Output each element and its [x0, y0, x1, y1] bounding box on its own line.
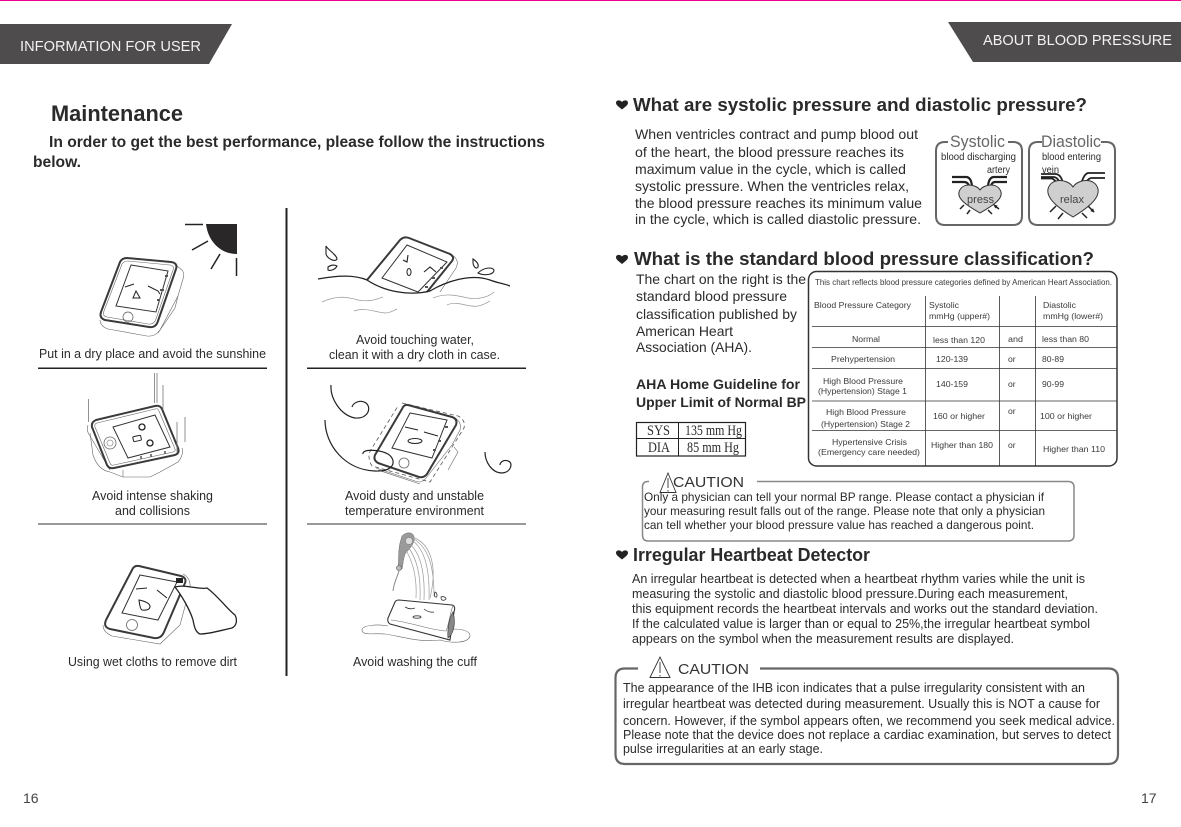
table: blood pressure categories [808, 272, 1117, 466]
page number: 16: 16 [23, 790, 39, 806]
icon: wind swirls [325, 385, 511, 473]
heart label: press: press [967, 194, 994, 206]
icon: cuff [388, 600, 455, 640]
banner: about blood pressure [948, 22, 1181, 62]
caption: Avoid dusty and unstable [345, 489, 484, 503]
banner: information for user [0, 24, 232, 64]
intro text [33, 134, 545, 171]
callout: second caution: CAUTION [678, 661, 749, 678]
caution text: Please note that the device does not replace a cardiac examination, but serves to detect [623, 727, 1111, 742]
banner: information for user: INFORMATION FOR USER [20, 39, 201, 55]
caution text: your measuring result falls out of the range. Please note that only a physician [644, 505, 1045, 518]
text: systolic and diastolic explanation: in the cycle, which is called diastolic pressure. [635, 211, 921, 227]
icon: water waves [318, 276, 510, 313]
caption: Put in a dry place and avoid the sunshine [39, 347, 266, 361]
caution text: pulse irregularities at an early stage. [623, 741, 823, 756]
caption: Avoid touching water, [356, 333, 474, 347]
icon: shaking monitor [87, 406, 182, 477]
heading: maintenance: Maintenance [51, 101, 183, 126]
page number: 17: 17 [1141, 790, 1157, 806]
table header: Blood Pressure Category [814, 300, 912, 310]
diagram: systolic heart [936, 132, 1022, 225]
text: AHA home guideline: Upper Limit of Normal BP [636, 394, 806, 410]
caution text: concern. However, if the symbol appears often, we recommend you seek medical advice. [623, 713, 1115, 728]
icon: compressed heart [959, 185, 1001, 213]
row: normal: less than 120 [933, 335, 985, 345]
icon: blood vessels [1041, 173, 1105, 185]
text: irregular heartbeat explanation: appears on the symbol when the measurement results are displayed. [632, 631, 1014, 646]
table title: This chart reflects blood pressure categories defined by American Heart Association. [815, 277, 1112, 287]
icon: warning triangle [660, 473, 676, 492]
icon: dusty monitor [369, 403, 464, 484]
table header: Systolic [929, 300, 960, 310]
table header: Diastolic [1043, 300, 1077, 310]
text: systolic and diastolic explanation [635, 126, 922, 227]
caution text: The appearance of the IHB icon indicates that a pulse irregularity consistent with an [623, 680, 1085, 695]
row: normal: Normal [852, 334, 880, 344]
caption [345, 489, 485, 518]
icon: blood vessels [952, 177, 1007, 186]
row: stage 2: High Blood Pressure [826, 407, 906, 417]
caution text [623, 680, 1115, 756]
section heading: irregular heartbeat: Irregular Heartbeat Detector [633, 545, 870, 565]
row: stage 2 [821, 406, 1092, 429]
caution text: Only a physician can tell your normal BP range. Please contact a physician if [644, 491, 1045, 504]
text: systolic and diastolic explanation: systolic pressure. When the ventricles relax, [635, 178, 909, 194]
panel: avoid dust and unstable temperature [325, 385, 511, 518]
caution text: irregular heartbeat was detected during measurement. Usually this is NOT a cause for [623, 696, 1101, 711]
icon: monitor being wiped [103, 566, 190, 644]
caption: and collisions [115, 504, 190, 518]
row: prehypertension: or [1008, 354, 1016, 364]
icon: sun [185, 224, 237, 276]
row: hypertensive crisis: Higher than 110 [1043, 444, 1105, 454]
table: home limits: DIA [648, 440, 670, 456]
text: AHA home guideline [636, 376, 806, 410]
icon: inward arrows [960, 205, 999, 214]
diagram: diastolic heart: Diastolic [1041, 132, 1101, 151]
row: stage 1: or [1008, 379, 1016, 389]
row: prehypertension: 80-89 [1042, 354, 1064, 364]
text: irregular heartbeat explanation: measuring the systolic and diastolic blood pressure.During each measurement, [632, 586, 1068, 601]
row: stage 2: 100 or higher [1040, 411, 1092, 421]
icon: monitor in sunshine [100, 258, 184, 336]
callout: first caution: CAUTION [673, 474, 744, 491]
row: stage 1: 90-99 [1042, 379, 1064, 389]
caption: temperature environment [345, 504, 485, 518]
intro text: below. [33, 154, 81, 171]
icon: heart bullet [616, 100, 628, 110]
heart label: relax: relax [1060, 194, 1085, 206]
panel: avoid washing the cuff [353, 533, 478, 669]
table: home limits: 135 mm Hg [685, 423, 742, 439]
icon: motion lines [88, 373, 185, 453]
caption [92, 489, 213, 518]
text: systolic and diastolic explanation: maximum value in the cycle, which is called [635, 161, 906, 177]
table: home limits: 85 mm Hg [687, 440, 739, 456]
callout: second caution [616, 657, 1118, 764]
row: normal: less than 80 [1042, 334, 1089, 344]
intro text: In order to get the best performance, please follow the instructions [49, 134, 545, 151]
text: chart introduction: American Heart [636, 323, 733, 339]
table: home limits: SYS [647, 423, 670, 439]
callout: first caution [642, 473, 1074, 541]
table header: mmHg (lower#) [1043, 311, 1103, 321]
icon: puddle [362, 625, 470, 642]
banner: about blood pressure: ABOUT BLOOD PRESSURE [983, 33, 1172, 49]
text: chart introduction: Association (AHA). [636, 339, 752, 355]
diagram: systolic heart: blood discharging [941, 152, 1016, 163]
icon: water drops [326, 246, 494, 275]
caution text [644, 491, 1045, 532]
table header: mmHg (upper#) [929, 311, 990, 321]
icon: outward arrows [1050, 206, 1094, 219]
table header [814, 300, 1103, 321]
text: systolic and diastolic explanation: the blood pressure reaches its minimum value [635, 195, 922, 211]
text: systolic and diastolic explanation: of the heart, the blood pressure reaches its [635, 144, 904, 160]
section heading: classification: What is the standard blood pressure classification? [634, 249, 1094, 269]
icon: shower head and water [393, 533, 446, 600]
row: normal: and [1008, 334, 1023, 344]
panel: avoid intense shaking [87, 373, 213, 518]
row: hypertensive crisis: (Emergency care needed) [818, 447, 920, 457]
text: systolic and diastolic explanation: When ventricles contract and pump blood out [635, 126, 918, 142]
icon: cloth [175, 586, 236, 634]
text: chart introduction [636, 271, 806, 355]
icon: heart bullet [616, 255, 628, 264]
diagram: diastolic heart: vein [1042, 165, 1059, 176]
caption: Avoid intense shaking [92, 489, 213, 503]
row: stage 1: High Blood Pressure [823, 376, 903, 386]
icon: relaxed heart [1048, 180, 1098, 217]
text: chart introduction: standard blood pressure [636, 288, 787, 304]
row: hypertensive crisis [818, 437, 1105, 457]
text: irregular heartbeat explanation: An irregular heartbeat is detected when a heartbeat rhythm varies while the unit is [632, 571, 1085, 586]
panel: avoid touching water [318, 237, 510, 362]
diagram: diastolic heart: blood entering [1042, 152, 1101, 163]
caption: clean it with a dry cloth in case. [329, 348, 500, 362]
row: stage 2: (Hypertension) Stage 2 [821, 419, 910, 429]
row: prehypertension: 120-139 [936, 354, 968, 364]
diagram: systolic heart: artery [987, 165, 1010, 176]
row: stage 1: 140-159 [936, 379, 968, 389]
text: irregular heartbeat explanation [632, 571, 1098, 646]
caption: Avoid washing the cuff [353, 655, 478, 669]
section heading: systolic and diastolic: What are systolic pressure and diastolic pressure? [633, 95, 1087, 115]
table: home limits [636, 422, 746, 456]
text: chart introduction: classification published by [636, 306, 797, 322]
row: stage 2: 160 or higher [933, 411, 985, 421]
caution text: can tell whether your blood pressure value has reached a dangerous point. [644, 519, 1034, 532]
icon: heart bullet [616, 550, 628, 560]
caption: Using wet cloths to remove dirt [68, 655, 238, 669]
caption [329, 333, 500, 362]
icon: monitor in water [367, 237, 457, 292]
row: hypertensive crisis: Hypertensive Crisis [832, 437, 907, 447]
row: prehypertension: Prehypertension [831, 354, 895, 364]
row: stage 1 [818, 376, 1064, 396]
text: AHA home guideline: AHA Home Guideline for [636, 376, 801, 392]
text: chart introduction: The chart on the right is the [636, 271, 806, 287]
panel: wet cloth cleaning [68, 566, 238, 669]
row: stage 1: (Hypertension) Stage 1 [818, 386, 907, 396]
icon: warning triangle [650, 657, 670, 678]
row: prehypertension [831, 354, 1064, 364]
row: hypertensive crisis: or [1008, 440, 1016, 450]
row: normal [852, 334, 1089, 345]
text: irregular heartbeat explanation: If the calculated value is larger than or equal to 25%,the irregular heartbeat symbol [632, 616, 1090, 631]
text: irregular heartbeat explanation: this equipment records the heartbeat intervals and works out the standard deviation. [632, 601, 1098, 616]
panel: dry place, no sunshine [39, 224, 266, 361]
diagram: diastolic heart [1029, 132, 1115, 225]
row: stage 2: or [1008, 406, 1016, 416]
diagram: systolic heart: Systolic [950, 132, 1005, 151]
row: hypertensive crisis: Higher than 180 [931, 440, 993, 450]
